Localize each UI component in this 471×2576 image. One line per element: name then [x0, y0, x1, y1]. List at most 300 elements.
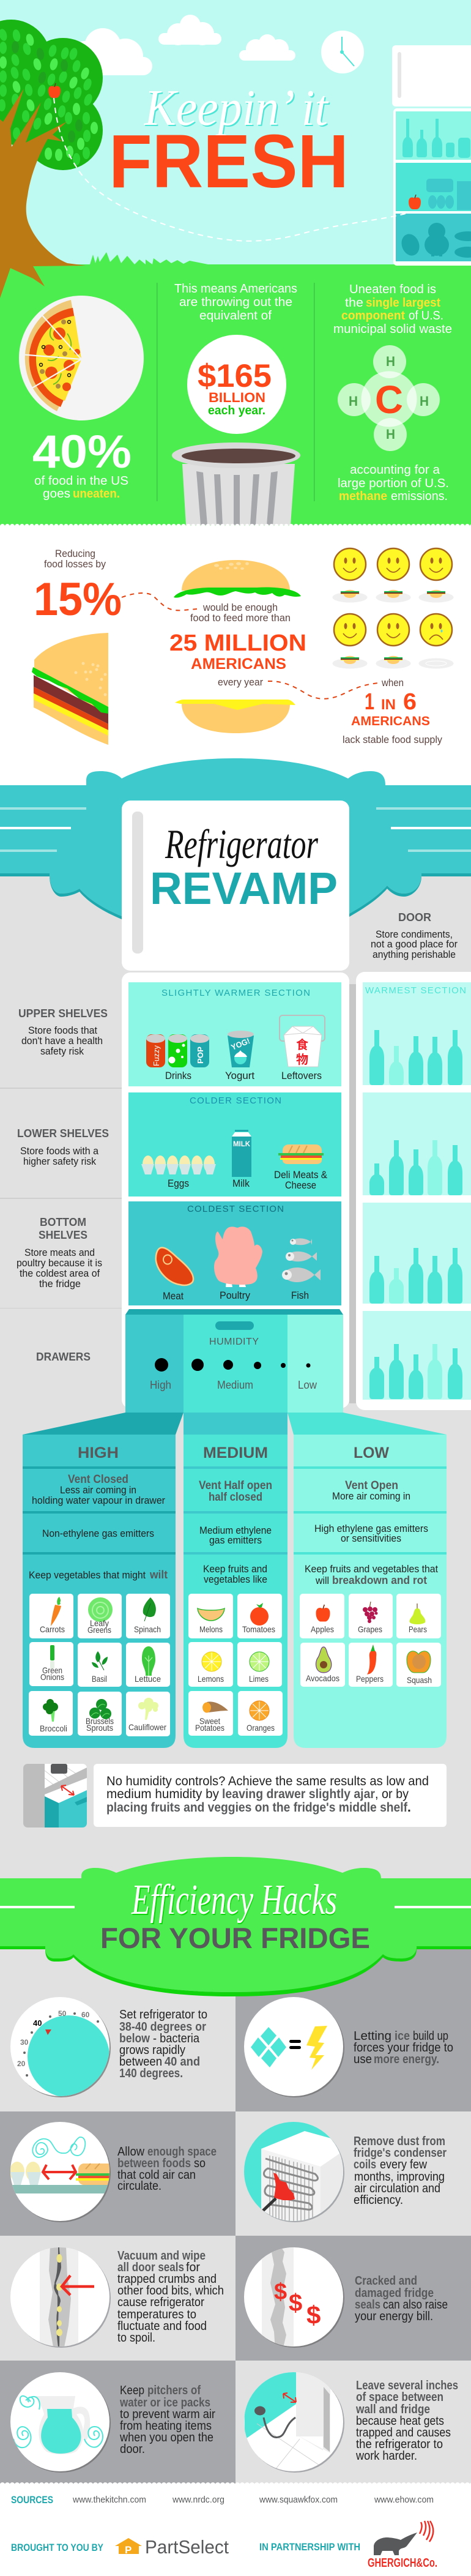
section: slightly warmer — [128, 982, 341, 1086]
text: temperatures to — [117, 2308, 196, 2321]
icon: dial: 50 — [58, 2009, 67, 2018]
text: 25 million americans: would be enough — [202, 602, 278, 613]
panel: feeding Americans — [32, 548, 454, 745]
fridge illustration — [122, 801, 471, 1410]
text: medium emitters: gas emitters — [209, 1534, 262, 1546]
card: green onions — [29, 1642, 73, 1686]
label: lower shelves — [17, 1127, 109, 1167]
text: 25 million americans — [169, 602, 306, 688]
text — [117, 2145, 217, 2193]
icon: dial — [10, 1997, 111, 2097]
label: upper shelves: don't have a health — [21, 1035, 103, 1047]
text: because heat gets — [356, 2414, 444, 2428]
card: avocados: Avocados — [306, 1673, 339, 1683]
text: medium emitters: Medium ethylene — [199, 1525, 272, 1536]
card: green onions: Onions — [40, 1672, 64, 1682]
scale dots — [155, 1358, 311, 1372]
card: green onions: Green — [42, 1665, 62, 1675]
label: milk: Milk — [232, 1178, 250, 1189]
label: deli meats and cheese: Deli Meats & — [274, 1169, 328, 1181]
text: below — [119, 2032, 150, 2045]
card: limes: Limes — [249, 1674, 269, 1684]
text: that cold air can — [117, 2168, 196, 2182]
text: between foods — [117, 2157, 191, 2170]
text: high emitters: or sensitivities — [341, 1533, 401, 1544]
text: municipal waste: municipal solid waste — [333, 323, 452, 336]
icon: milk: MILK — [233, 1140, 250, 1148]
sources: www.ehow.com — [374, 2495, 434, 2505]
badge: $165 billion: $165 — [198, 358, 272, 394]
pizza chart — [19, 296, 144, 420]
text: Allow — [117, 2145, 145, 2159]
stat: 40%: goes — [43, 487, 70, 501]
label: upper shelves — [18, 1007, 108, 1057]
icon: coils with brush — [244, 2122, 344, 2222]
title: efficiency hacks — [131, 1876, 337, 1925]
text: seals — [355, 2298, 380, 2312]
icon: bottles — [369, 1030, 462, 1399]
text: reducing losses: food losses by — [44, 558, 106, 570]
sponsor: PartSelect — [11, 2536, 229, 2558]
card: cauliflower — [126, 1692, 170, 1736]
card: apples: Apples — [311, 1624, 334, 1634]
icon: door seal with crumbs — [10, 2243, 111, 2353]
fridge top door — [122, 801, 349, 971]
label: bottom shelves: Store meats and — [24, 1247, 95, 1258]
text: vent open: Vent Open — [345, 1479, 398, 1492]
card: melons: Melons — [199, 1624, 223, 1634]
text — [354, 2135, 447, 2207]
section: colder — [128, 1092, 341, 1197]
card: leafy greens: Greens — [87, 1625, 111, 1635]
label: lower shelves: higher safety risk — [23, 1155, 96, 1167]
text: all door seals — [117, 2261, 184, 2274]
partner: Ghergich: IN PARTNERSHIP WITH — [259, 2541, 360, 2553]
text: municipal waste: of U.S. — [409, 309, 443, 323]
text: when 1 in 6 — [343, 677, 442, 745]
card: pears: Pears — [409, 1624, 427, 1634]
drawer: humidity control — [23, 1309, 447, 1435]
title: Keepin' it: Keepin’ it — [144, 80, 329, 136]
text: - bacteria — [153, 2032, 200, 2045]
drawer: humidity control: HUMIDITY — [209, 1337, 259, 1347]
icon: angled half burger — [32, 633, 108, 745]
text: 40 and — [165, 2055, 200, 2069]
icon: cracked seal with dollars: $ — [274, 2279, 287, 2305]
text: pitchers of — [147, 2384, 201, 2397]
text — [354, 2029, 453, 2066]
text: cause refrigerator — [117, 2296, 204, 2309]
card: spinach: Spinach — [134, 1624, 161, 1634]
label: meat: Meat — [163, 1290, 184, 1302]
falling path — [54, 98, 406, 241]
text: fluctuate and food — [117, 2320, 207, 2333]
grass — [90, 252, 220, 264]
panel: efficiency hack cells — [0, 1949, 471, 2484]
card: lettuce — [126, 1643, 170, 1687]
card: lettuce: Lettuce — [135, 1674, 161, 1684]
text: methane: methane — [339, 490, 387, 503]
panel: food waste statistics — [0, 282, 471, 532]
text: Remove dust from — [354, 2135, 445, 2148]
tree trunk — [0, 89, 86, 298]
card: sweet potatoes — [188, 1691, 233, 1736]
card: cauliflower: Cauliflower — [128, 1722, 166, 1732]
card: grapes — [349, 1594, 393, 1638]
label: lower shelves: LOWER SHELVES — [17, 1127, 109, 1140]
icon: drinks: Fuzzy — [152, 1045, 161, 1066]
arrow: dashed line to 1 in 6 — [268, 681, 378, 699]
icon: cracked seal with dollars: $ — [306, 2301, 321, 2329]
text: other food bits, which — [117, 2284, 224, 2298]
label: door: Store condiments, — [376, 928, 453, 940]
icon: dial: 60 — [81, 2010, 90, 2019]
card: squash — [396, 1643, 441, 1687]
card: leafy greens: Leafy — [90, 1618, 109, 1628]
text: 25 million americans: 25 MILLION — [169, 630, 306, 656]
text: forces your fridge to — [354, 2041, 453, 2055]
icon: leftovers: 食 — [296, 1037, 308, 1052]
text: vent half open — [199, 1479, 272, 1504]
text: high emitters: High ethylene gas emitters — [314, 1523, 428, 1534]
panel: high humidity column — [23, 1435, 176, 1748]
text: coils — [354, 2158, 376, 2171]
text box: No humidity controls? Achieve the same results as low and — [106, 1774, 429, 1788]
clock — [321, 31, 364, 73]
hack 2: ice energy — [244, 1997, 453, 2097]
card: broccoli: Broccoli — [40, 1723, 67, 1733]
icon: leftovers — [280, 1015, 325, 1067]
label: upper shelves: safety risk — [40, 1045, 84, 1057]
section: colder: COLDER SECTION — [190, 1096, 281, 1106]
icon: water pitcher — [10, 2372, 111, 2473]
card: oranges: Oranges — [247, 1723, 275, 1733]
stat: 40%: of food in the US — [34, 474, 128, 488]
text: between — [119, 2055, 162, 2069]
label: drawers: DRAWERS — [36, 1351, 91, 1363]
text: when 1 in 6: lack stable food supply — [343, 734, 442, 745]
hack 5: door seals — [10, 2243, 224, 2353]
fridge body — [122, 973, 349, 1408]
text: vent closed — [32, 1473, 165, 1506]
sponsor: PartSelect: BROUGHT TO YOU BY — [11, 2542, 104, 2553]
text: methane — [338, 463, 449, 503]
icon: meat — [156, 1247, 193, 1285]
label: upper shelves: Store foods that — [28, 1025, 97, 1036]
text: air circulation and — [354, 2182, 440, 2195]
text: breakdown and rot — [305, 1563, 438, 1586]
hero section — [0, 0, 471, 528]
hack 1: temperature dial — [10, 1997, 207, 2097]
scale labels — [150, 1379, 317, 1391]
text: the refrigerator to — [356, 2438, 443, 2451]
sources: www.squawkfox.com — [259, 2495, 338, 2505]
icon: trash can — [172, 442, 300, 525]
card: peppers: Peppers — [356, 1674, 384, 1684]
hack 6: cracked seals — [244, 2243, 448, 2353]
text box: . — [407, 1801, 411, 1815]
hack 4: condenser coils — [244, 2122, 447, 2228]
text: keep fruits — [203, 1563, 267, 1585]
text: door. — [120, 2443, 145, 2456]
text: your energy bill. — [355, 2310, 433, 2323]
diagram: methane molecule: H — [386, 354, 395, 369]
heading: high: HIGH — [78, 1444, 119, 1462]
card: spinach — [126, 1594, 170, 1638]
text: work harder. — [355, 2449, 417, 2463]
label: yogurt: Yogurt — [225, 1070, 254, 1081]
text — [355, 2379, 458, 2463]
text: municipal waste: the — [345, 296, 363, 310]
cloud right — [239, 34, 295, 61]
text: so — [194, 2157, 206, 2170]
text: for — [186, 2261, 200, 2274]
apple on shelf — [409, 195, 421, 209]
icon: top bun — [174, 560, 301, 598]
text box: placing fruits and veggies on the fridge's middle shelf — [106, 1801, 408, 1815]
text — [119, 2384, 215, 2456]
badge: $165 billion: each year. — [208, 404, 265, 417]
pictogram: smiling faces and plates — [333, 548, 454, 668]
text: breakdown and rot: breakdown and rot — [332, 1574, 427, 1586]
label: door — [371, 911, 458, 960]
text: use — [354, 2053, 372, 2066]
card: leafy greens — [78, 1594, 122, 1638]
text: 25 million americans: AMERICANS — [191, 655, 286, 673]
hack 7: pitchers — [10, 2372, 215, 2473]
label: fish: Fish — [291, 1290, 309, 1301]
text: breakdown and rot: Keep fruits and vegetables that — [305, 1563, 438, 1575]
icon: drinks — [146, 1034, 209, 1067]
text: circulate. — [117, 2179, 161, 2193]
text: water or ice packs — [119, 2396, 210, 2410]
text: Set refrigerator to — [119, 2008, 207, 2022]
sources: SOURCES — [11, 2494, 53, 2506]
card: sweet potatoes: Potatoes — [195, 1723, 224, 1733]
icon: fridge and wall plug — [244, 2372, 344, 2473]
icon: cracked seal with dollars — [244, 2243, 344, 2353]
panel: grey fridge section background — [0, 875, 471, 1891]
label: upper shelves: UPPER SHELVES — [18, 1007, 108, 1020]
card: peppers — [349, 1643, 393, 1687]
text: throwing out — [174, 282, 297, 323]
text — [117, 2249, 224, 2345]
text: throwing out: are throwing out the — [179, 296, 292, 309]
scale labels: Low — [298, 1379, 317, 1391]
label: bottom shelves: BOTTOM — [40, 1216, 86, 1228]
icon: leftovers: 物 — [296, 1053, 308, 1067]
label: leftovers: Leftovers — [281, 1070, 322, 1081]
label: door: DOOR — [398, 911, 431, 924]
text: vent half open: Vent Half open — [199, 1479, 272, 1492]
sources: www.thekitchn.com — [72, 2495, 146, 2505]
text: from heating items — [120, 2419, 212, 2433]
card: basil — [78, 1643, 122, 1687]
text: breakdown and rot: will — [315, 1575, 329, 1586]
badge: $165 billion: BILLION — [209, 390, 265, 405]
text box: , or by — [375, 1787, 409, 1801]
title: Refrigerator: Refrigerator — [165, 821, 318, 867]
text: damaged fridge — [355, 2287, 434, 2300]
diagram: methane molecule: H — [349, 394, 358, 409]
card: tomatoes: Tomatoes — [242, 1624, 275, 1634]
card: sweet potatoes: Sweet — [199, 1716, 220, 1726]
text: medium emitters — [199, 1525, 272, 1546]
left labels — [0, 911, 458, 1363]
arrow: dashed line to burger text — [122, 593, 197, 610]
text — [355, 2274, 448, 2323]
text: trapped crumbs and — [117, 2272, 217, 2286]
sponsor: PartSelect: P — [125, 2544, 132, 2556]
text: methane: accounting for a — [350, 463, 440, 477]
text: ice — [395, 2029, 410, 2043]
label: deli meats and cheese: Cheese — [285, 1179, 316, 1191]
card: pears — [396, 1594, 441, 1638]
text: wilt: Keep vegetables that might — [29, 1569, 146, 1581]
icon: ice equals energy — [244, 1997, 344, 2097]
title: for your fridge: FOR YOUR FRIDGE — [100, 1922, 370, 1954]
label: eggs: Eggs — [168, 1178, 189, 1189]
text: grows rapidly — [119, 2044, 185, 2057]
footer — [0, 2482, 471, 2576]
apple in tree — [48, 83, 61, 98]
icon: fish — [282, 1238, 321, 1282]
text: when 1 in 6: when — [381, 677, 404, 689]
text: months, improving — [354, 2170, 445, 2184]
text: can also raise — [383, 2298, 448, 2312]
text: throwing out: This means Americans — [174, 282, 297, 296]
icon: deli sandwich — [278, 1144, 324, 1164]
card: broccoli — [29, 1691, 73, 1736]
tree canopy — [0, 20, 103, 170]
label: lower shelves: Store foods with a — [20, 1145, 99, 1157]
text: methane: emissions. — [391, 490, 448, 503]
text: vent open — [332, 1479, 410, 1502]
section: slightly warmer: SLIGHTLY WARMER SECTION — [161, 988, 310, 998]
badge: $165 billion — [187, 335, 286, 434]
text: when you open the — [119, 2431, 213, 2444]
text: Cracked and — [355, 2274, 417, 2288]
text: build up — [413, 2029, 448, 2043]
card: limes — [237, 1642, 282, 1687]
icon: bottom bun — [175, 700, 295, 733]
text: more energy. — [374, 2053, 439, 2066]
card: tomatoes — [237, 1594, 282, 1638]
partner: Ghergich — [259, 2521, 437, 2570]
sources: www.nrdc.org — [172, 2495, 224, 2505]
card: oranges — [238, 1691, 283, 1736]
text: keep fruits: Keep fruits and — [203, 1563, 267, 1575]
cloud middle — [158, 15, 221, 45]
label: poultry: Poultry — [220, 1290, 250, 1301]
text: when 1 in 6: AMERICANS — [351, 714, 430, 728]
label: bottom shelves: poultry because it is — [17, 1257, 102, 1269]
text: enough space — [147, 2145, 217, 2159]
label: door: not a good place for — [371, 938, 458, 950]
diagram: methane molecule: C — [375, 378, 403, 422]
card: basil: Basil — [92, 1674, 107, 1684]
heading: medium: MEDIUM — [203, 1444, 268, 1462]
text: wilt: wilt — [149, 1569, 168, 1581]
text: 140 degrees. — [119, 2067, 183, 2080]
panel: low humidity column — [294, 1435, 447, 1748]
text: municipal waste: Uneaten food is — [349, 283, 436, 296]
card: apples — [300, 1594, 344, 1638]
text: reducing losses — [34, 548, 122, 625]
text: municipal waste: component — [341, 309, 405, 323]
note: no humidity controls — [23, 1764, 447, 1827]
heading: low: LOW — [354, 1444, 389, 1462]
section: warmest shelves — [363, 982, 471, 1400]
label: deli meats and cheese — [274, 1169, 328, 1191]
text: reducing losses: 15% — [34, 573, 122, 625]
text: Keep — [120, 2384, 144, 2397]
diagram: methane molecule — [338, 345, 440, 451]
text: to spoil. — [117, 2331, 155, 2345]
text: when 1 in 6: IN — [381, 696, 396, 713]
section: coldest: COLDEST SECTION — [187, 1204, 284, 1214]
icon: airflow and food — [10, 2122, 111, 2222]
label: bottom shelves: SHELVES — [39, 1229, 87, 1241]
text: Letting — [354, 2029, 391, 2043]
card: brussels sprouts: Sprouts — [86, 1723, 113, 1733]
cloud left — [69, 28, 152, 75]
text: to prevent warm air — [120, 2408, 215, 2421]
panel: medium humidity column — [184, 1435, 287, 1748]
text: of space between — [356, 2391, 443, 2404]
text — [119, 2008, 207, 2080]
text: reducing losses: Reducing — [55, 548, 95, 559]
icon: eggs — [141, 1155, 216, 1174]
fridge door — [356, 972, 471, 1410]
scale labels: Medium — [217, 1379, 253, 1391]
banner: efficiency hacks — [0, 1857, 471, 1996]
title: efficiency hacks: Efficiency Hacks — [131, 1876, 337, 1924]
icon: poultry — [214, 1226, 262, 1287]
label: drinks: Drinks — [165, 1070, 191, 1081]
stat: 40% — [32, 426, 132, 501]
text: 38-40 degrees or — [119, 2020, 206, 2034]
card: brussels sprouts — [78, 1692, 122, 1736]
title: REVAMP: REVAMP — [150, 863, 338, 914]
text: when 1 in 6: 6 — [403, 689, 417, 715]
card: melons — [188, 1594, 233, 1638]
section: warmest shelves: WARMEST SECTION — [365, 985, 466, 996]
title: efficiency hacks: Efficiency Hacks — [132, 1878, 337, 1925]
icon: dial: 30 — [20, 2038, 29, 2047]
text: vent closed: Vent Closed — [68, 1473, 128, 1486]
label: door: anything perishable — [373, 949, 456, 960]
card: carrots — [29, 1594, 73, 1638]
text box: medium humidity by — [106, 1787, 219, 1801]
text: 25 million americans: food to feed more than — [190, 612, 291, 624]
diagram: methane molecule: H — [420, 394, 429, 409]
icon: yogurt: YOG! — [230, 1036, 251, 1052]
text: efficiency. — [354, 2193, 403, 2207]
title: Keepin' it: Keepin’ it — [145, 81, 330, 138]
text: when 1 in 6: 1 — [365, 689, 374, 715]
text: throwing out: equivalent of — [199, 309, 272, 323]
text: vent closed: holding water vapour in drawer — [32, 1495, 165, 1506]
card: lemons — [188, 1642, 233, 1687]
icon: drinks: POP — [196, 1047, 205, 1064]
text: municipal waste: single largest — [366, 296, 440, 310]
scale labels: High — [150, 1379, 171, 1391]
label: bottom shelves: the fridge — [39, 1278, 81, 1290]
text: gas emitters: Non-ethylene gas emitters — [42, 1528, 154, 1539]
icon: yogurt — [228, 1031, 254, 1067]
text: vent open: More air coming in — [332, 1490, 410, 1502]
